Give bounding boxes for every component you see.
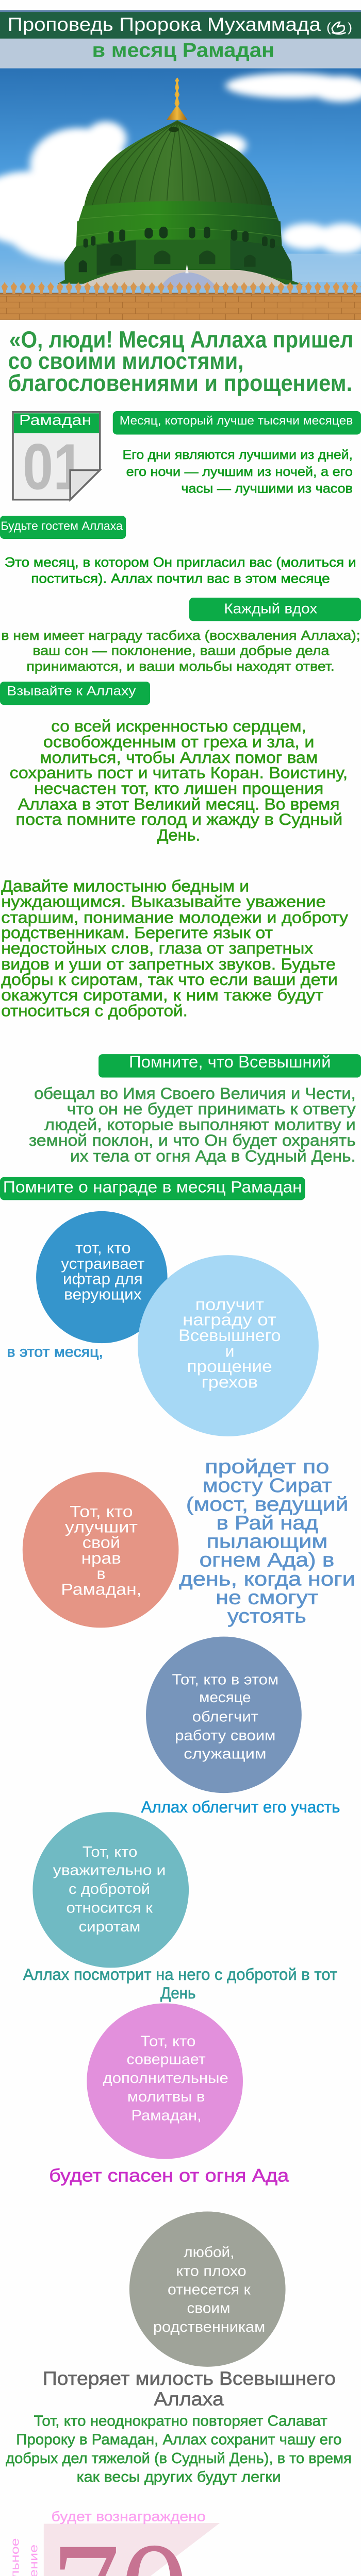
- quote heading: со своими милостями,: [8, 348, 243, 374]
- text: Sirat bridge: пройдет по: [205, 1456, 329, 1478]
- circle: reward and forgiveness: награду от: [183, 1311, 276, 1329]
- photo: green dome of the Prophet's Mosque: [0, 69, 361, 320]
- text: charity and kindness: недостойных слов, глаза от запретных: [1, 939, 313, 957]
- circle: reward and forgiveness: грехов: [202, 1372, 258, 1391]
- section: extra prayers and relatives: [43, 2003, 336, 2410]
- pill: call upon Allah: [0, 682, 150, 705]
- text: salawat: Пророку в Рамадан, Аллах сохранит чашу его: [16, 2431, 342, 2448]
- pill: every breath: Каждый вдох: [224, 601, 317, 617]
- pill: be the guest of Allah: [0, 516, 126, 539]
- circle: reward and forgiveness: и: [225, 1342, 234, 1360]
- header section: [0, 10, 361, 320]
- circle: easing servants' work: служащим: [184, 1745, 267, 1762]
- text: sincerity: молиться, чтобы Аллах помог вам: [40, 749, 318, 767]
- sky sliver above title: [0, 10, 361, 12]
- pill: every breath: [189, 598, 361, 621]
- text: salawat: [6, 2413, 352, 2485]
- text: breath reward: в нем имеет награду тасбиха (восхваления Аллаха);: [1, 628, 360, 643]
- text: Sirat bridge: не смогут: [216, 1587, 319, 1608]
- text: promise: [29, 1084, 356, 1165]
- circle: iftar: ифтар для: [63, 1270, 143, 1287]
- circle: kindness to orphans: сиротам: [79, 1919, 140, 1935]
- text: Sirat bridge: [179, 1456, 355, 1627]
- circle: reward and forgiveness: прощение: [187, 1357, 272, 1376]
- text: Sirat bridge: огнем Ада) в: [200, 1550, 334, 1571]
- text: Sirat bridge: устоять: [227, 1605, 306, 1627]
- circle: kindness to orphans: относится к: [67, 1900, 153, 1916]
- text: sincerity: поста помните голод и жажду в Судный: [15, 810, 342, 828]
- text: sincerity: сохранить пост и читать Коран. Воистину,: [10, 764, 348, 782]
- circle: easing servants' work: облегчит: [192, 1708, 258, 1725]
- text: best days and nights: Его дни являются лучшими из дней,: [123, 447, 353, 462]
- circle: good character: в: [97, 1565, 105, 1583]
- quote heading: [8, 327, 353, 396]
- circle: relatives: [129, 2212, 286, 2367]
- pill: remember the Almighty: [99, 1053, 361, 1078]
- text: sincerity: со всей искренностью сердцем,: [51, 717, 306, 735]
- text: promise: земной поклон, и что Он будет охранять: [29, 1131, 356, 1149]
- text: Allah will look with kindness: Аллах посмотрит на него с добротой в тот: [23, 1965, 337, 1984]
- circle: kindness to orphans: Тот, кто: [83, 1844, 138, 1860]
- circle: relatives: родственникам: [153, 2319, 265, 2335]
- circle: reward and forgiveness: [138, 1255, 319, 1436]
- pill: month better than a thousand: Месяц, который лучше тысячи месяцев: [120, 414, 353, 428]
- icon: calendar: 01: [23, 430, 84, 503]
- circle: easing servants' work: [146, 1637, 302, 1793]
- text: sincerity: Аллаха в этот Великий месяц. Во время: [18, 795, 339, 813]
- icon: calendar: [13, 412, 101, 503]
- text: invitation: поститься). Аллах почтил вас в этом месяце: [31, 571, 330, 586]
- title bar: Проповедь Пророка Мухаммада: [8, 14, 321, 36]
- text: best days and nights: часы — лучшими из часов: [181, 481, 353, 496]
- subtitle bar: [0, 39, 361, 69]
- text: sincerity: [10, 717, 348, 844]
- circle: good character: улучшит: [65, 1518, 138, 1536]
- text: charity and kindness: родственникам. Берегите язык от: [1, 924, 273, 942]
- text: best days and nights: [123, 447, 353, 496]
- text: charity and kindness: добры к сиротам, так что если ваши дети: [1, 971, 338, 989]
- pill: call upon Allah: Взывайте к Аллаху: [7, 683, 136, 698]
- text: promise: людей, которые выполняют молитву и: [44, 1115, 356, 1133]
- text: charity and kindness: окажутся сиротами, к ним также будут: [1, 986, 324, 1004]
- circle: relatives: кто плохо: [176, 2263, 247, 2279]
- icon: calendar: Рамадан: [19, 412, 91, 429]
- text: will lose mercy: [43, 2368, 336, 2410]
- circle: easing servants' work: работу своим: [175, 1727, 275, 1744]
- text: charity and kindness: видов и уши от запретных звуков. Будьте: [1, 955, 336, 973]
- chart: seventy times reward: будет вознаграждено: [52, 2509, 206, 2524]
- text: invitation: Это месяц, в котором Он пригласил вас (молиться и: [5, 555, 356, 570]
- circle: good character: [23, 1472, 178, 1628]
- text: charity and kindness: Давайте милостыню бедным и: [1, 877, 249, 895]
- title bar: (: [326, 20, 331, 35]
- circle: relatives: любой,: [184, 2244, 234, 2261]
- circle: iftar: верующих: [64, 1285, 142, 1303]
- text: best days and nights: его ночи — лучшим из ночей, а его: [126, 464, 353, 479]
- circle: good character: Тот, кто: [70, 1503, 133, 1521]
- text: Allah will look with kindness: День: [160, 1984, 195, 2002]
- circle: additional prayers: совершает: [127, 2051, 206, 2067]
- text: will lose mercy: Аллаха: [154, 2388, 224, 2410]
- text: salawat: добрых дел тяжелой (в Судный День), в то время: [6, 2450, 352, 2467]
- text: will lose mercy: Потеряет милость Всевышнего: [43, 2368, 336, 2389]
- circle: additional prayers: [87, 2003, 243, 2159]
- text: Sirat bridge: мосту Сират: [203, 1475, 332, 1497]
- section: remember the Almighty: [0, 1053, 361, 1436]
- text: charity and kindness: старшим, понимание молодежи и доброту: [1, 908, 348, 926]
- circle: good character: нрав: [81, 1549, 121, 1567]
- circle: easing servants' work: Тот, кто в этом: [172, 1671, 278, 1688]
- text: breath reward: [1, 628, 360, 674]
- chart: seventy times reward: [8, 2509, 352, 2576]
- text: Allah will look with kindness: [23, 1965, 337, 2002]
- circle: additional prayers: Рамадан,: [131, 2108, 202, 2124]
- circle: additional prayers: Тот, кто: [140, 2033, 195, 2049]
- text: sincerity: несчастен тот, кто лишен прощения: [34, 779, 323, 798]
- circle: iftar: тот, кто: [75, 1239, 131, 1257]
- title bar: [0, 12, 361, 39]
- circle: relatives: отнесется к: [168, 2281, 251, 2298]
- pill: remember the reward: Помните о награде в месяц Рамадан: [3, 1178, 302, 1196]
- label: in this month: в этот месяц,: [7, 1344, 103, 1360]
- circle: additional prayers: дополнительные: [103, 2070, 228, 2087]
- circle: good character: свой: [83, 1533, 120, 1551]
- pill: month better than a thousand: [113, 411, 361, 435]
- text: promise: обещал во Имя Своего Величия и Чести,: [34, 1084, 356, 1103]
- text: Allah eases his lot: Аллах облегчит его участь: [141, 1798, 340, 1816]
- subtitle bar: в месяц Рамадан: [92, 40, 274, 61]
- text: salawat: как весы других будут легки: [77, 2469, 281, 2485]
- circle: iftar: устраивает: [61, 1255, 144, 1273]
- text: promise: их тела от огня Ада в Судный День.: [70, 1147, 356, 1165]
- text: invitation: [5, 555, 356, 586]
- text: charity and kindness: [1, 877, 348, 1020]
- text: Sirat bridge: (мост, ведущий: [186, 1494, 348, 1515]
- text: promise: что он не будет принимать к ответу: [67, 1100, 356, 1118]
- circle: easing servants' work: месяце: [199, 1689, 251, 1706]
- text: sincerity: День.: [157, 826, 200, 844]
- section: Ramadan calendar and verses: [0, 411, 361, 674]
- circle: kindness to orphans: с добротой: [69, 1881, 150, 1897]
- text: charity and kindness: относиться с добротой.: [1, 1002, 188, 1020]
- section: orphans: [23, 1798, 340, 2002]
- text: charity and kindness: нуждающимся. Выказывайте уважение: [1, 893, 326, 910]
- pill: remember the Almighty: Помните, что Всевышний: [129, 1053, 331, 1071]
- section: good character: [23, 1456, 355, 1793]
- text: breath reward: ваш сон — поклонение, ваши добрые дела: [32, 643, 329, 658]
- text: Sirat bridge: пылающим: [206, 1531, 327, 1552]
- section: call upon Allah: [0, 682, 348, 1020]
- section: salawat and seventy times: [6, 2413, 352, 2576]
- circle: reward and forgiveness: получит: [195, 1295, 264, 1314]
- text: breath reward: принимаются, и ваши мольбы находят ответ.: [26, 659, 335, 674]
- circle: reward and forgiveness: Всевышнего: [178, 1326, 281, 1345]
- text: Sirat bridge: день, когда ноги: [179, 1568, 355, 1590]
- circle: kindness to orphans: [32, 1812, 189, 1968]
- text: sincerity: освобожденным от греха и зла, и: [43, 733, 314, 751]
- circle: additional prayers: молитвы в: [127, 2089, 205, 2105]
- circle: iftar: [36, 1211, 168, 1343]
- circle: good character: Рамадан,: [61, 1580, 142, 1598]
- text: saved from the fire: будет спасен от огня Ада: [49, 2165, 289, 2185]
- pill: be the guest of Allah: Будьте гостем Аллаха: [1, 519, 123, 532]
- circle: kindness to orphans: уважительно и: [53, 1862, 166, 1878]
- text: salawat: Тот, кто неоднократно повторяет Салават: [34, 2413, 327, 2429]
- text: Sirat bridge: в Рай над: [217, 1512, 318, 1534]
- circle: relatives: своим: [187, 2300, 230, 2316]
- title bar: ): [348, 20, 352, 35]
